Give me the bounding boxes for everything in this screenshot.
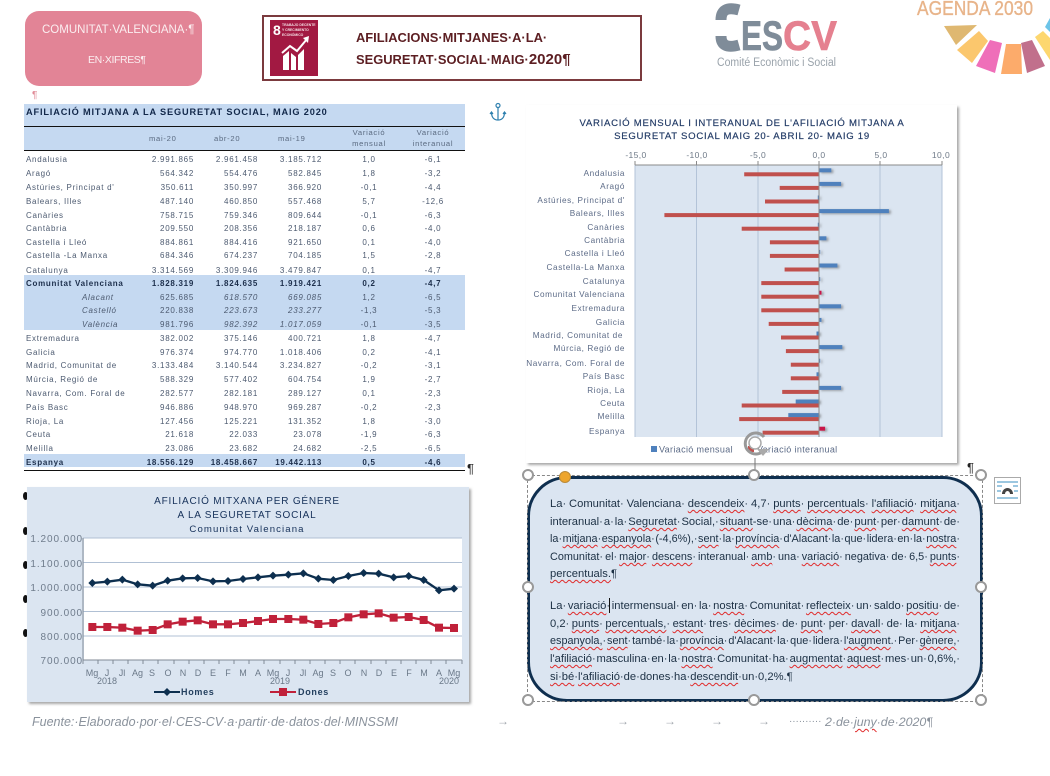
paragraph 2: l'afiliació· masculina· en· la· nostra· Comunitat· ha· augmentat· aquest· mes· un· 0,6%,· <box>550 653 960 665</box>
table rows: -2,3 <box>425 403 441 412</box>
table rows: 208.356 <box>224 224 258 233</box>
table rows: Castella i Lleó <box>26 238 87 247</box>
logo: CES CV: Comité Econòmic i Social <box>717 57 836 69</box>
table rows: 554.476 <box>224 169 258 178</box>
table rows: 24.682 <box>293 444 322 453</box>
month labels: J <box>105 668 109 678</box>
regional badge: Comunitat Valenciana en xifres: EN·XIFRES¶ <box>88 54 146 66</box>
category labels: Catalunya <box>583 277 625 286</box>
category labels: Astúries, Principat d' <box>537 196 625 205</box>
legend: Variació interanual <box>757 444 838 454</box>
data table: afiliació mitjana <box>24 104 465 471</box>
value axis labels: 900.000 <box>41 608 83 619</box>
table rows: -4,7 <box>425 266 441 275</box>
heading: SEGURETAT·SOCIAL·MAIG·2020¶ <box>356 51 571 68</box>
month labels: F <box>225 668 231 678</box>
table rows: 0,6 <box>362 224 376 233</box>
table rows: 3.133.484 <box>152 361 194 370</box>
table rows: 1,2 <box>362 293 376 302</box>
table rows: -6,3 <box>425 430 441 439</box>
table rows: -6,5 <box>425 293 441 302</box>
table rows: Melilla <box>26 444 54 453</box>
table rows: 674.237 <box>224 251 258 260</box>
regional badge: Comunitat Valenciana en xifres <box>25 11 202 86</box>
table rows: -4,7 <box>425 279 441 288</box>
logo: Agenda 2030 wheel <box>916 0 1050 74</box>
table rows: 809.644 <box>288 211 322 220</box>
month labels: Jl <box>119 668 125 678</box>
category labels: Espanya <box>589 427 625 436</box>
table rows: Rioja, La <box>26 417 64 426</box>
table rows: 23.078 <box>293 430 322 439</box>
table rows: 0,2 <box>362 348 376 357</box>
paragraph 2: La· variació· intermensual· en· la· nostra· Comunitat· reflecteix· un· saldo· positiu· de· <box>550 600 960 612</box>
table rows: 0,1 <box>362 266 376 275</box>
category labels: Múrcia, Regió de <box>554 344 625 353</box>
table rows: 1.824.635 <box>216 279 258 288</box>
category labels: Melilla <box>598 412 625 421</box>
table rows: -3,0 <box>425 417 441 426</box>
table rows: -4,6 <box>425 458 441 467</box>
table rows: Cantàbria <box>26 224 67 233</box>
value axis labels: 1.200.000 <box>30 534 83 545</box>
table bottom rule <box>24 470 465 471</box>
table rows: 1.828.319 <box>152 279 194 288</box>
category labels: Galicia <box>596 318 625 327</box>
table rows: 625.685 <box>160 293 194 302</box>
month labels: M <box>239 668 247 678</box>
table rows: Navarra, Com. Foral de <box>26 389 125 398</box>
table rows: 969.287 <box>288 403 322 412</box>
paragraph 2: si·bé· l'afiliació· de· dones· ha· descendit· un· 0,2%.¶ <box>550 671 793 683</box>
category labels: Madrid, Comunitat de <box>533 331 623 340</box>
table rows: 131.352 <box>288 417 322 426</box>
category axis <box>818 165 820 437</box>
month labels: 2019 <box>270 676 290 686</box>
table rows: 1,8 <box>362 417 376 426</box>
paragraph 1: Comunitat· el· major· descens· interanual· amb· una· variació· negativa· de· 6,5· punts· <box>550 551 960 563</box>
table rows: 218.187 <box>288 224 322 233</box>
month labels <box>86 668 460 686</box>
table rows: 582.845 <box>288 169 322 178</box>
chart title: AFILIACIÓ MITXANA PER GÉNERE <box>154 494 340 507</box>
paragraph 1: la· mitjana· espanyola· (-4,6%),· sent· la· província· d'Alacant· la· que· lidera· en· la· nostra· <box>550 533 960 545</box>
table rows: 1,0 <box>362 155 376 164</box>
month labels: Jl <box>300 668 306 678</box>
logo: CES CV: ES <box>741 12 783 59</box>
table rows: Extremadura <box>26 334 80 343</box>
category labels: Ceuta <box>600 399 625 408</box>
source note: Fuente:·Elaborado·por·el·CES-CV·a·partir·de·datos·del·MINSSMI <box>32 715 398 729</box>
month labels: O <box>344 668 352 678</box>
month labels: A <box>255 668 261 678</box>
category labels: Rioja, La <box>587 386 625 395</box>
table rows: 3.479.847 <box>280 266 322 275</box>
value axis labels: 1.000.000 <box>30 583 83 594</box>
month labels: 2020 <box>439 676 459 686</box>
selection frame of text box <box>527 475 983 702</box>
month labels: S <box>330 668 336 678</box>
month labels: M <box>420 668 428 678</box>
table rows: 684.346 <box>160 251 194 260</box>
paragraph 2: espanyola,· sent· també· la· província· d'Alacant· la· que· lidera· l'augment.· Per· gènere,· <box>550 635 960 647</box>
table rows: Madrid, Comunitat de <box>26 361 117 370</box>
value axis labels: 800.000 <box>41 632 83 643</box>
selection handles <box>522 469 987 706</box>
table rows: 3.185.712 <box>280 155 322 164</box>
table title band <box>24 104 465 126</box>
logo: CES CV <box>716 3 838 69</box>
table rows: 19.442.113 <box>275 458 322 467</box>
table rows: -5,3 <box>425 306 441 315</box>
category labels: Extremadura <box>572 304 625 313</box>
month labels: O <box>164 668 172 678</box>
date: 2·de·juny·de·2020¶ <box>825 715 933 729</box>
table rows: 1.017.059 <box>280 320 322 329</box>
table rows: -4,7 <box>425 334 441 343</box>
plot area <box>84 538 462 660</box>
table rows: 5,7 <box>362 197 376 206</box>
series: variació interanual <box>664 172 819 435</box>
table rows: -3,2 <box>425 169 441 178</box>
tab arrows: → <box>664 714 676 728</box>
value axis labels: 1.100.000 <box>30 559 83 570</box>
table rows: 981.796 <box>160 320 194 329</box>
table rows: Castelló <box>82 306 117 315</box>
category labels: País Basc <box>583 372 625 381</box>
table rows: 366.920 <box>288 183 322 192</box>
table rows: 23.682 <box>229 444 258 453</box>
table rows: -2,8 <box>425 251 441 260</box>
chart panel <box>27 487 469 702</box>
table rows: -12,6 <box>422 197 444 206</box>
month labels: Mg <box>448 668 460 678</box>
table title band: AFILIACIÓ MITJANA A LA SEGURETAT SOCIAL, MAIG 2020 <box>26 107 328 117</box>
highlight: Espanya <box>24 454 465 467</box>
stray paragraph mark: ¶ <box>32 90 37 101</box>
table rows: -1,9 <box>361 430 377 439</box>
category labels: Balears, Illes <box>570 209 625 218</box>
table rows: 1,5 <box>362 251 376 260</box>
table rows: 884.861 <box>160 238 194 247</box>
table rows: -0,1 <box>361 183 377 192</box>
table rows: 1,9 <box>362 375 376 384</box>
plot area <box>635 165 942 437</box>
chart title: SEGURETAT SOCIAL MAIG 20- ABRIL 20- MAIG 19 <box>614 131 870 142</box>
table header band <box>24 126 465 151</box>
table header band: mensual <box>352 138 386 148</box>
paragraph 1: percentuals.¶ <box>550 568 617 580</box>
value axis: -5,0 <box>750 150 766 160</box>
table rows: 18.458.667 <box>211 458 258 467</box>
chart title: VARIACIÓ MENSUAL I INTERANUAL DE L'AFILIACIÓ MITJANA A <box>579 118 905 129</box>
paragraph mark after table: ¶ <box>467 461 474 476</box>
table header band: abr-20 <box>214 134 240 143</box>
tab arrows: → <box>497 714 509 728</box>
legend: Homes <box>181 687 215 697</box>
table rows: 921.650 <box>288 238 322 247</box>
table rows <box>26 155 444 467</box>
table rows: 3.140.544 <box>216 361 258 370</box>
table rows: Espanya <box>26 458 64 467</box>
table rows: Aragó <box>26 169 51 178</box>
table rows: 948.970 <box>224 403 258 412</box>
icon: SDG 8 decent work: TRABAJO DECENTE <box>282 23 316 27</box>
month labels: N <box>180 668 186 678</box>
category labels: Andalusia <box>584 169 625 178</box>
table rows: 0,1 <box>362 389 376 398</box>
title box <box>262 15 642 81</box>
table rows: 3.314.569 <box>152 266 194 275</box>
table rows: Canàries <box>26 211 64 220</box>
series: homes and dones <box>92 573 454 631</box>
category labels: Castella i Lleó <box>565 249 625 258</box>
table rows: Ceuta <box>26 430 51 439</box>
value axis: 0,0 <box>812 150 826 160</box>
value axis: 5,0 <box>874 150 888 160</box>
line chart: afiliació per gènere <box>27 487 472 706</box>
legend: Variació mensual <box>659 444 733 454</box>
table rows: -3,1 <box>425 361 441 370</box>
table rows: 618.570 <box>224 293 258 302</box>
table rows: 1.018.406 <box>280 348 322 357</box>
icon: SDG 8 decent work: 8 <box>273 22 281 38</box>
icon: SDG 8 decent work: Y CRECIMIENTO <box>282 28 309 32</box>
table rows: Comunitat Valenciana <box>26 279 124 288</box>
icon: rotation handle <box>744 432 769 470</box>
table rows: 884.416 <box>224 238 258 247</box>
table rows: 976.374 <box>160 348 194 357</box>
table rows: 1,8 <box>362 334 376 343</box>
table rows: -0,1 <box>361 320 377 329</box>
table rows: 758.715 <box>160 211 194 220</box>
table rows: -2,3 <box>425 389 441 398</box>
month labels: A <box>436 668 442 678</box>
tab arrows: → <box>617 714 629 728</box>
month labels: D <box>195 668 202 678</box>
table rows: 0,1 <box>362 238 376 247</box>
paragraph 1 <box>550 498 960 584</box>
month labels: F <box>406 668 412 678</box>
tab arrows <box>497 714 770 728</box>
table rows: 759.346 <box>224 211 258 220</box>
table rows: -2,5 <box>361 444 377 453</box>
chart title: Comunitat Valenciana <box>189 524 305 535</box>
paragraph 1: La· Comunitat· Valenciana· descendeix· 4,7· punts· percentuals· l'afiliació· mitjana· <box>550 498 960 510</box>
table rows: 220.838 <box>160 306 194 315</box>
value axis <box>625 150 950 165</box>
month labels: E <box>210 668 216 678</box>
table rows: -4,1 <box>425 348 441 357</box>
leader dots: ·········· <box>789 716 821 727</box>
table rows: 350.997 <box>224 183 258 192</box>
logo: CES CV: CV <box>783 12 837 59</box>
table rows: Múrcia, Regió de <box>26 375 98 384</box>
table rows: Balears, Illes <box>26 197 82 206</box>
legend <box>154 687 329 697</box>
bar chart: variació mensual i interanual <box>526 106 960 466</box>
month labels: Mg <box>86 668 98 678</box>
table header band: mai-20 <box>149 134 177 143</box>
paragraph 1: interanual· a· la· Seguretat· Social,· situant-se· una· dècima· de· punt· per· damunt· de· <box>550 516 960 528</box>
table rows: -2,7 <box>425 375 441 384</box>
table rows: 209.550 <box>160 224 194 233</box>
month labels: S <box>149 668 155 678</box>
table rows: 669.085 <box>288 293 322 302</box>
category labels: Comunitat Valenciana <box>534 290 625 299</box>
table rows: 125.221 <box>224 417 258 426</box>
tab arrows: → <box>711 714 723 728</box>
category labels: Castella-La Manxa <box>547 263 625 272</box>
table rows: -0,2 <box>361 361 377 370</box>
table header band: mai-19 <box>278 134 306 143</box>
table rows: -4,4 <box>425 183 441 192</box>
value axis: -15,0 <box>625 150 647 160</box>
table rows: 282.181 <box>224 389 258 398</box>
table rows: 1,8 <box>362 169 376 178</box>
table rows: Alacant <box>82 293 114 302</box>
table rows: -6,3 <box>425 211 441 220</box>
text box: analysis <box>527 476 983 702</box>
value axis labels <box>30 534 83 667</box>
table rows: 946.886 <box>160 403 194 412</box>
table rows: Astúries, Principat d' <box>26 183 115 192</box>
table rows: 23.086 <box>165 444 194 453</box>
table rows: 400.721 <box>288 334 322 343</box>
table rows: 704.185 <box>288 251 322 260</box>
table rows: -1,3 <box>361 306 377 315</box>
table rows: 382.002 <box>160 334 194 343</box>
table rows: Andalusia <box>26 155 68 164</box>
month labels: 2018 <box>97 676 117 686</box>
list bullets behind gender chart <box>23 492 27 637</box>
series: variació mensual <box>788 168 889 431</box>
table rows: 233.277 <box>288 306 322 315</box>
month labels: J <box>286 668 290 678</box>
table rows: 577.402 <box>224 375 258 384</box>
table rows: 0,2 <box>362 279 376 288</box>
table rows: -0,2 <box>361 403 377 412</box>
table rows: 982.392 <box>224 320 258 329</box>
month labels: N <box>361 668 367 678</box>
table rows: 223.673 <box>224 306 258 315</box>
table rows: Castella -La Manxa <box>26 251 108 260</box>
table rows: Galicia <box>26 348 56 357</box>
month labels: D <box>376 668 383 678</box>
month labels: E <box>391 668 397 678</box>
regional badge: Comunitat Valenciana en xifres: COMUNITAT·VALENCIANA·¶ <box>42 24 194 36</box>
table rows: -3,5 <box>425 320 441 329</box>
legend: Dones <box>298 687 329 697</box>
table header band: Variació <box>353 128 385 137</box>
category labels <box>526 169 625 436</box>
table rows: 289.127 <box>288 389 322 398</box>
heading: AFILIACIONS·MITJANES·A·LA· <box>356 30 547 45</box>
highlight: Comunitat Valenciana <box>24 275 465 330</box>
table header band: Variació <box>417 128 449 137</box>
table rows: -4,0 <box>425 224 441 233</box>
icon: layout options <box>994 477 1021 504</box>
chart title <box>154 494 340 535</box>
value axis: -10,0 <box>686 150 708 160</box>
paragraph mark after chart: ¶ <box>967 460 974 475</box>
table rows: -6,5 <box>425 444 441 453</box>
chart title: A LA SEGURETAT SOCIAL <box>177 510 317 521</box>
table rows: 2.961.458 <box>216 155 258 164</box>
category labels: Navarra, Com. Foral de <box>526 359 625 368</box>
table rows: -4,0 <box>425 238 441 247</box>
table rows: País Basc <box>26 403 68 412</box>
chart title <box>579 118 905 142</box>
table rows: 282.577 <box>160 389 194 398</box>
table rows: 460.850 <box>224 197 258 206</box>
table rows: 127.456 <box>160 417 194 426</box>
table rows: València <box>82 320 118 329</box>
heading <box>356 30 571 68</box>
category labels: Canàries <box>587 223 625 232</box>
paragraph 2 <box>550 600 960 686</box>
table rows: -6,1 <box>425 155 441 164</box>
category labels: Cantàbria <box>584 236 625 245</box>
table rows: 0,5 <box>362 458 376 467</box>
table rows: 375.146 <box>224 334 258 343</box>
table rows: 2.991.865 <box>152 155 194 164</box>
table rows: 1.919.421 <box>280 279 322 288</box>
table rows: 18.556.129 <box>147 458 194 467</box>
table rows: 588.329 <box>160 375 194 384</box>
icon: SDG 8 decent work <box>270 20 318 76</box>
tab arrows: → <box>758 714 770 728</box>
table rows: 22.033 <box>229 430 258 439</box>
month labels: Ag <box>132 668 143 678</box>
table rows: 564.342 <box>160 169 194 178</box>
month labels: Mg <box>267 668 279 678</box>
table rows: 3.234.827 <box>280 361 322 370</box>
table rows: 487.140 <box>160 197 194 206</box>
table rows: Catalunya <box>26 266 69 275</box>
chart panel <box>526 105 957 463</box>
table rows: 21.618 <box>165 430 194 439</box>
value axis labels: 700.000 <box>41 656 83 667</box>
table rows: 604.754 <box>288 375 322 384</box>
table rows: -0,1 <box>361 211 377 220</box>
icon: anchor <box>490 102 506 121</box>
month labels: Ag <box>312 668 324 678</box>
value axis: 10,0 <box>932 150 950 160</box>
legend <box>651 444 838 454</box>
icon: SDG 8 decent work: ECONÓMICO <box>282 32 304 37</box>
text cursor <box>609 598 610 613</box>
table rows: 350.611 <box>161 183 194 192</box>
table rows: 3.309.946 <box>216 266 258 275</box>
table rows: 974.770 <box>224 348 258 357</box>
table header band: interanual <box>413 138 453 148</box>
table rows: 557.468 <box>288 197 322 206</box>
paragraph 2: 0,2· punts· percentuals,· estant· tres· dècimes· de· punt· per· davall· de· la· mitjana· <box>550 618 960 630</box>
category labels: Aragó <box>600 182 625 191</box>
